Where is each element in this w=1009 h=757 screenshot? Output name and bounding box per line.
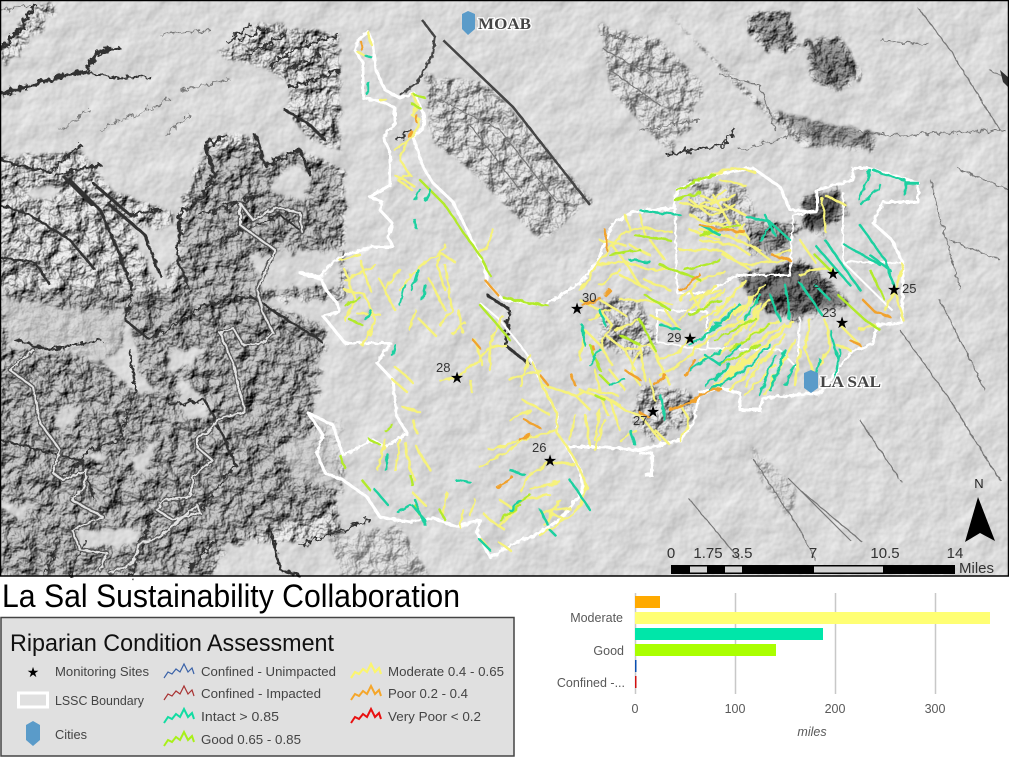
monitoring site stars and numbers: ★ — [570, 299, 584, 318]
legend: moderate — [351, 664, 504, 679]
legend: monitoring sites — [27, 665, 149, 681]
monitoring site stars and numbers: ★ — [543, 451, 557, 470]
monitoring site stars and numbers: 28 — [436, 360, 450, 375]
scale bar — [667, 545, 994, 577]
chart category labels: Confined -... — [557, 676, 625, 690]
fault line and river bend near Moab — [400, 20, 590, 205]
north arrow: N — [974, 476, 984, 491]
stream segments: good (lime green) — [340, 95, 885, 520]
legend: poor: Poor 0.2 - 0.4 — [388, 687, 468, 701]
city marker: La Sal: LA SAL — [820, 374, 881, 391]
bar: confined unimpacted — [635, 660, 636, 672]
city marker: Moab: MOAB — [478, 16, 531, 33]
scale bar: 14 — [947, 545, 963, 562]
scale bar: 10.5 — [870, 545, 900, 562]
monitoring site stars and numbers: 25 — [902, 281, 916, 296]
monitoring site stars and numbers — [436, 264, 916, 470]
chart value axis: 100 — [725, 702, 745, 716]
chart value axis: miles — [797, 725, 827, 739]
legend: LSSC boundary: LSSC Boundary — [55, 694, 145, 708]
legend: LSSC boundary — [18, 693, 145, 708]
monitoring site stars and numbers: ★ — [826, 264, 840, 283]
legend: monitoring sites: ★ — [27, 665, 39, 681]
Colorado River meanders — [10, 203, 302, 573]
monitoring site stars and numbers: 24 — [812, 276, 826, 291]
scale bar: 0 — [667, 545, 675, 562]
chart value axis: 300 — [925, 702, 945, 716]
legend panel — [1, 618, 514, 756]
legend: good: Good 0.65 - 0.85 — [201, 733, 301, 747]
scale bar: Miles — [959, 560, 994, 577]
bar: intact — [635, 628, 823, 640]
scale bar: 7 — [809, 545, 817, 562]
chart value axis: 200 — [825, 702, 845, 716]
monitoring site stars and numbers: 27 — [633, 413, 647, 428]
monitoring site stars and numbers: 26 — [532, 440, 546, 455]
terrain: canyon lands and mountains — [0, 0, 1009, 576]
monitoring site stars and numbers: ★ — [646, 402, 660, 421]
legend: confined impacted: Confined - Impacted — [201, 687, 321, 701]
LSSC boundary line on map — [300, 32, 918, 557]
monitoring site stars and numbers: ★ — [887, 280, 901, 299]
legend: confined unimpacted: Confined - Unimpacted — [201, 665, 336, 679]
title: La Sal Sustainability Collaboration — [2, 578, 460, 614]
scale bar: 3.5 — [732, 545, 752, 562]
city marker: La Sal — [804, 370, 881, 393]
monitoring site stars and numbers: 29 — [667, 330, 681, 345]
legend: good — [164, 732, 301, 747]
monitoring site stars and numbers: ★ — [835, 313, 849, 332]
legend: monitoring sites: Monitoring Sites — [55, 665, 149, 679]
monitoring site stars and numbers: 30 — [582, 290, 596, 305]
monitoring site stars and numbers: ★ — [683, 329, 697, 348]
chart category labels: Moderate — [570, 611, 623, 625]
legend: confined impacted — [164, 686, 321, 701]
bar chart: miles by condition — [557, 593, 990, 739]
chart value axis — [632, 702, 945, 739]
legend: intact: Intact > 0.85 — [201, 710, 279, 724]
legend: moderate: Moderate 0.4 - 0.65 — [388, 665, 504, 679]
bar: confined impacted — [635, 676, 636, 688]
legend: very poor: Very Poor < 0.2 — [388, 710, 481, 724]
legend heading: Riparian Condition Assessment — [10, 630, 334, 657]
chart category labels — [557, 611, 625, 690]
bar: moderate — [635, 612, 990, 624]
city marker: Moab — [462, 11, 531, 35]
map panel — [0, 0, 1009, 577]
legend: cities — [26, 721, 87, 746]
legend: poor — [351, 686, 468, 701]
chart value axis: 0 — [632, 702, 639, 716]
legend: very poor — [351, 709, 481, 724]
stream network — [340, 32, 918, 550]
stream segments: poor (orange) — [361, 42, 890, 487]
monitoring site stars and numbers: 23 — [822, 305, 836, 320]
legend: intact — [164, 709, 279, 724]
monitoring site stars and numbers: ★ — [450, 368, 464, 387]
stream segments: intact (teal) — [365, 55, 918, 550]
bar: poor — [635, 596, 660, 608]
stream segments: moderate (yellow) — [340, 32, 903, 550]
scale bar: 1.75 — [693, 545, 723, 562]
legend: cities: Cities — [55, 728, 87, 742]
north arrow — [965, 476, 995, 542]
chart category labels: Good — [593, 644, 624, 658]
legend: confined unimpacted — [164, 664, 336, 679]
bar: good — [635, 644, 776, 656]
